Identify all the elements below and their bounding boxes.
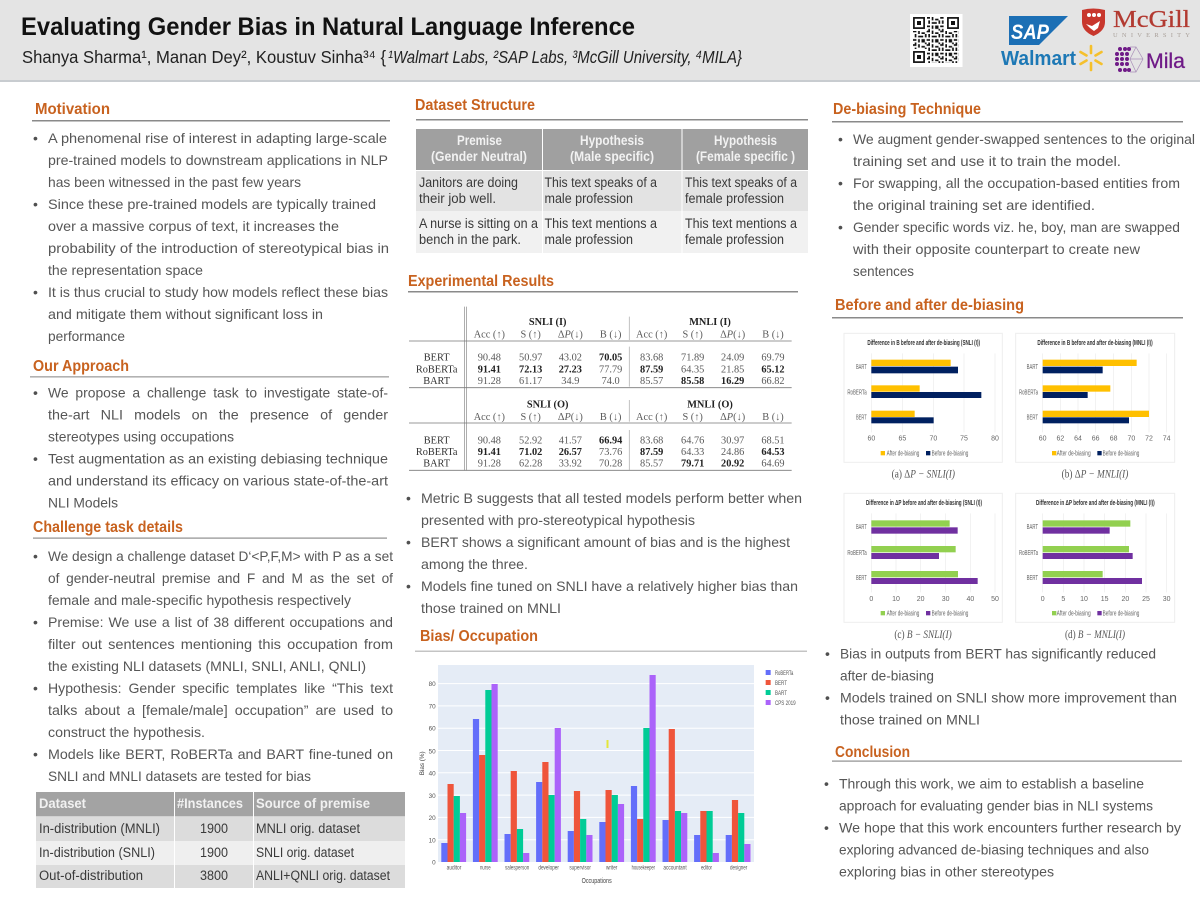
- chart b: 74: [1163, 435, 1171, 442]
- heading: Dataset Structure: Dataset Structure: [415, 97, 535, 114]
- text block: challenge bullets: [33, 548, 393, 784]
- text block: motivation bullets: performance: [48, 328, 125, 344]
- charts row 1: [844, 333, 1175, 480]
- text block: results bullets: presented with pro-stereotypical hypothesis: [421, 512, 695, 528]
- table: experimental results: 69.79: [761, 353, 785, 364]
- chart a: BART: [856, 364, 867, 371]
- authors and affiliations: ¹Walmart Labs, ²SAP Labs, ³McGill University, ⁴MILA}: [388, 47, 742, 67]
- chart d: (d) B − MNLI(I): [1065, 629, 1125, 641]
- chart axes and labels: Bias (%): [419, 751, 426, 775]
- text block: technique bullets: For swapping, all the occupation-based entities from: [853, 175, 1180, 191]
- chart c: (c) B − SNLI(I): [894, 629, 952, 641]
- table: experimental results: RoBERTa: [416, 447, 458, 458]
- chart a: Difference in B before and after de-biasing (SNLI (I)): [867, 340, 980, 347]
- chart c: BART: [856, 524, 867, 531]
- table: experimental results: 43.02: [559, 353, 582, 364]
- text block: approach bullets: and understand its efficacy on various state-of-the-art: [48, 472, 388, 488]
- table: experimental results: 66.82: [761, 376, 785, 387]
- text block: conclusion bullets: [824, 776, 1181, 880]
- table: experimental results: 27.23: [559, 364, 582, 375]
- table: experimental results: 62.28: [519, 459, 542, 470]
- chart legend: CPS 2019: [775, 700, 796, 707]
- text block: technique bullets: •: [838, 219, 843, 235]
- logo: McGill: UNIVERSITY: [1113, 32, 1190, 39]
- heading: Our Approach: Our Approach: [33, 358, 129, 375]
- text block: results bullets: •: [406, 578, 411, 594]
- text block: motivation bullets: •: [33, 196, 38, 212]
- table: experimental results: 72.13: [519, 364, 542, 375]
- table: dataset structure: (Female specific ): [696, 149, 795, 164]
- table: experimental results: 64.76: [681, 435, 704, 446]
- chart axes and labels: accountant: [663, 864, 687, 871]
- table: experimental results: 65.12: [761, 364, 785, 375]
- chart c: 50: [991, 596, 999, 603]
- chart c: Difference in ΔP before and after de-biasing (SNLI (I)): [866, 500, 982, 507]
- title: Evaluating Gender Bias in Natural Language Inference: [21, 13, 635, 41]
- text block: motivation bullets: pre-trained models to downstream applications in NLP: [48, 152, 388, 168]
- table: experimental results: 64.69: [761, 459, 785, 470]
- chart d: 0: [1041, 596, 1045, 603]
- text block: approach bullets: We propose a challenge task to investigate state-of-: [48, 384, 388, 400]
- chart d: [1016, 493, 1175, 641]
- chart b: 66: [1092, 435, 1100, 442]
- table: dataset structure: [416, 129, 808, 253]
- header band: [0, 0, 1200, 82]
- text block: conclusion bullets: approach for evaluating gender bias in NLI systems: [839, 798, 1153, 814]
- chart b: (b) ΔP − MNLI(I): [1062, 468, 1129, 480]
- table: experimental results: 91.28: [478, 459, 501, 470]
- chart b: [1016, 333, 1175, 480]
- chart axes and labels: Occupations: [582, 878, 612, 885]
- table: experimental results: MNLI (O): [687, 400, 733, 411]
- chart a: RoBERTa: [847, 389, 867, 396]
- table: experimental results: 87.59: [640, 447, 663, 458]
- table: experimental results: BERT: [424, 353, 450, 364]
- table: experimental results: 34.9: [561, 376, 579, 387]
- table: dataset sources: 1900: [200, 821, 228, 836]
- chart legend: BART: [775, 690, 787, 697]
- chart a: Before de-biasing: [932, 450, 968, 457]
- table: dataset sources: #Instances: [177, 796, 243, 811]
- table: dataset sources: In-distribution (SNLI): [39, 845, 155, 860]
- table: experimental results: B (↓): [600, 412, 621, 423]
- chart axes and labels: designer: [730, 864, 747, 871]
- table: dataset structure: Janitors are doing: [419, 175, 518, 190]
- text block: approach bullets: the-art NLI models on the presence of gender: [48, 406, 388, 422]
- table: experimental results: BART: [423, 376, 451, 387]
- table: experimental results: 83.68: [640, 353, 663, 364]
- table: experimental results: 91.41: [478, 447, 501, 458]
- table: dataset structure: This text mentions a: [544, 216, 657, 231]
- chart a: (a) ΔP − SNLI(I): [892, 468, 955, 480]
- chart c: 40: [966, 596, 974, 603]
- chart axes and labels: salesperson: [505, 864, 530, 871]
- table: dataset sources: [36, 792, 405, 888]
- table: experimental results: SNLI (I): [529, 317, 566, 328]
- chart axes and labels: developer: [538, 864, 559, 871]
- chart a: [844, 333, 1002, 480]
- chart d: RoBERTa: [1019, 550, 1038, 557]
- text block: results bullets: BERT shows a significant amount of bias and is the highest: [421, 534, 790, 550]
- table: experimental results: 52.92: [519, 435, 542, 446]
- text block: results bullets: [406, 490, 802, 616]
- table: dataset structure: bench in the park.: [419, 232, 521, 247]
- chart c: BERT: [856, 575, 867, 582]
- chart d: 10: [1080, 596, 1088, 603]
- table: dataset structure: A nurse is sitting on a: [419, 216, 538, 231]
- chart c: [844, 493, 1002, 641]
- table: experimental results: 79.71: [681, 459, 704, 470]
- chart b: RoBERTa: [1019, 389, 1038, 396]
- chart b: After de-biasing: [1057, 450, 1091, 457]
- text block: approach bullets: NLI Models: [48, 494, 118, 510]
- table: experimental results: 90.48: [478, 353, 501, 364]
- text block: technique bullets: sentences: [853, 263, 914, 279]
- table: experimental results: S (↑): [520, 329, 541, 340]
- table: dataset structure: male profession: [544, 191, 633, 206]
- table: experimental results: 85.57: [640, 376, 663, 387]
- chart d: 25: [1142, 596, 1150, 603]
- table: experimental results: 70.28: [599, 459, 622, 470]
- chart c: After de-biasing: [887, 610, 919, 617]
- table: dataset structure: This text speaks of a: [544, 175, 657, 190]
- table: dataset sources: MNLI orig. dataset: [256, 821, 360, 836]
- table: experimental results: Acc (↑): [474, 329, 505, 340]
- table: experimental results: 16.29: [721, 376, 744, 387]
- text block: approach bullets: stereotypes using occupations: [48, 428, 234, 444]
- authors and affiliations: Shanya Sharma¹, Manan Dey², Koustuv Sinha³⁴ {: [22, 47, 386, 67]
- text block: conclusion bullets: Through this work, we aim to establish a baseline: [839, 776, 1144, 792]
- text block: challenge bullets: Premise: We use a list of 38 different occupations and: [48, 614, 393, 630]
- text block: conclusion bullets: We hope that this work encounters further research by: [839, 820, 1181, 836]
- table: dataset structure: female profession: [685, 191, 784, 206]
- panel: left column: [30, 101, 405, 888]
- table: experimental results: 85.57: [640, 459, 663, 470]
- chart axes and labels: housekeeper: [632, 864, 655, 871]
- text block: conclusion bullets: •: [824, 820, 829, 836]
- table: experimental results: 68.51: [761, 435, 785, 446]
- text block: technique bullets: •: [838, 175, 843, 191]
- chart c: 0: [869, 596, 873, 603]
- text block: challenge bullets: talks about a [female/male] occupation” are used to: [48, 702, 393, 718]
- text block: approach bullets: •: [33, 450, 38, 466]
- chart a: 60: [867, 435, 875, 442]
- text block: results bullets: among the three.: [421, 556, 528, 572]
- table: dataset structure: Premise: [457, 133, 502, 148]
- table: experimental results: SNLI (O): [527, 400, 568, 411]
- bars: RoBERTa: [441, 719, 732, 862]
- chart b: 62: [1056, 435, 1064, 442]
- table: experimental results: 91.28: [478, 376, 501, 387]
- table: dataset structure: Hypothesis: [714, 133, 777, 148]
- text block: results bullets: •: [406, 490, 411, 506]
- table: experimental results: 70.05: [599, 353, 622, 364]
- chart axes and labels: 80: [429, 681, 436, 688]
- chart axes and labels: 60: [429, 726, 436, 733]
- text block: motivation bullets: over a massive corpus of text, it increases the: [48, 218, 339, 234]
- text block: motivation bullets: It is thus crucial to study how models reflect these bias: [48, 284, 388, 300]
- table: dataset sources: 1900: [200, 845, 228, 860]
- chart b: 64: [1074, 435, 1082, 442]
- chart d: 5: [1061, 596, 1065, 603]
- chart b: BERT: [1027, 414, 1038, 421]
- authors and affiliations: [22, 47, 742, 67]
- table: experimental results: B (↓): [762, 329, 784, 340]
- chart b: 60: [1039, 435, 1047, 442]
- chart legend: [766, 670, 796, 707]
- heading: Experimental Results: Experimental Results: [408, 273, 554, 290]
- table: experimental results: 33.92: [559, 459, 582, 470]
- chart c: 20: [917, 596, 925, 603]
- text block: de-biasing findings: •: [825, 646, 830, 662]
- charts row 2: [844, 493, 1175, 641]
- chart c: Before de-biasing: [932, 610, 968, 617]
- text block: motivation bullets: •: [33, 284, 38, 300]
- text block: results bullets: Metric B suggests that all tested models perform better when: [421, 490, 802, 506]
- text block: conclusion bullets: exploring advanced de-biasing techniques and also: [839, 842, 1149, 858]
- heading: Challenge task details: Challenge task details: [33, 519, 183, 536]
- table: experimental results: S (↑): [682, 412, 703, 423]
- table: experimental results: 50.97: [519, 353, 542, 364]
- chart axes and labels: auditor: [447, 864, 461, 871]
- chart a: 70: [929, 435, 937, 442]
- text block: challenge bullets: We design a challenge dataset D‘<P,F,M> with P as a set: [48, 548, 393, 564]
- heading: Before and after de-biasing: Before and after de-biasing: [835, 297, 1024, 314]
- logo: Mila: [1115, 47, 1185, 73]
- chart d: After de-biasing: [1057, 610, 1091, 617]
- chart axes and labels: 70: [429, 703, 436, 710]
- text block: results bullets: those trained on MNLI: [421, 600, 561, 616]
- table: experimental results: MNLI (I): [689, 317, 731, 328]
- chart d: 20: [1121, 596, 1129, 603]
- chart b: 72: [1145, 435, 1153, 442]
- text block: challenge bullets: Hypothesis: Gender specific templates like “This text: [48, 680, 393, 696]
- text block: motivation bullets: Since these pre-trained models are typically trained: [48, 196, 376, 212]
- text block: technique bullets: Gender specific words viz. he, boy, man are swapped: [853, 219, 1180, 235]
- chart a: 65: [898, 435, 906, 442]
- text block: motivation bullets: probability of the introduction of stereotypical bias in: [48, 240, 389, 256]
- chart b: 70: [1127, 435, 1135, 442]
- table: dataset sources: Out-of-distribution: [39, 868, 143, 883]
- text block: challenge bullets: •: [33, 746, 38, 762]
- table: experimental results: 85.58: [681, 376, 704, 387]
- text block: de-biasing findings: those trained on MNLI: [840, 712, 980, 728]
- logo: McGill: [1082, 7, 1190, 39]
- text block: de-biasing findings: after de-biasing: [840, 668, 934, 684]
- text block: challenge bullets: •: [33, 614, 38, 630]
- text block: motivation bullets: has been witnessed in the past few years: [48, 174, 301, 190]
- table: dataset sources: 3800: [200, 868, 228, 883]
- table: experimental results: BERT: [424, 435, 450, 446]
- table: experimental results: 77.79: [599, 364, 622, 375]
- panel: right column: [824, 101, 1195, 880]
- table: dataset structure: their job well.: [419, 191, 496, 206]
- text block: challenge bullets: filter out sentences mentioning this occupation from: [48, 636, 393, 652]
- table: experimental results: S (↑): [682, 329, 703, 340]
- chart a: After de-biasing: [887, 450, 919, 457]
- table: experimental results: ΔP(↓): [558, 329, 583, 340]
- text block: challenge bullets: •: [33, 548, 38, 564]
- text block: challenge bullets: Models like BERT, RoBERTa and BART fine-tuned on: [48, 746, 393, 762]
- logo: SAP: SAP: [1011, 21, 1050, 44]
- table: experimental results: 91.41: [478, 364, 501, 375]
- table: experimental results: 30.97: [721, 435, 744, 446]
- chart axes and labels: 20: [429, 815, 436, 822]
- chart d: BART: [1027, 524, 1038, 531]
- table: dataset structure: male profession: [544, 232, 633, 247]
- heading: Bias/ Occupation: Bias/ Occupation: [420, 628, 538, 645]
- chart axes and labels: 50: [429, 748, 436, 755]
- logo: Mila: Mila: [1146, 50, 1185, 73]
- logo: SAP: [1009, 16, 1068, 45]
- heading: De-biasing Technique: De-biasing Technique: [833, 101, 981, 118]
- text block: de-biasing findings: Bias in outputs from BERT has significantly reduced: [840, 646, 1156, 662]
- text block: challenge bullets: female and male-specific hypothesis respectively: [48, 592, 351, 608]
- chart c: 30: [942, 596, 950, 603]
- table: dataset sources: SNLI orig. dataset: [256, 845, 354, 860]
- table: dataset structure: This text speaks of a: [685, 175, 797, 190]
- heading: Motivation: Motivation: [35, 101, 110, 118]
- chart axes and labels: editor: [701, 864, 712, 871]
- table: experimental results: 71.89: [681, 353, 704, 364]
- table: experimental results: Acc (↑): [636, 412, 667, 423]
- table: experimental results: 90.48: [478, 435, 501, 446]
- chart legend: RoBERTa: [775, 670, 794, 677]
- table: dataset sources: Source of premise: [256, 796, 370, 811]
- table: experimental results: 66.94: [599, 435, 622, 446]
- text block: de-biasing findings: •: [825, 690, 830, 706]
- bars: CPS 2019: [460, 675, 750, 862]
- logo: Walmart: Walmart: [1001, 48, 1076, 70]
- table: experimental results: ΔP(↓): [720, 412, 745, 423]
- table: experimental results: 74.0: [602, 376, 620, 387]
- table: experimental results: RoBERTa: [416, 364, 458, 375]
- chart c: 10: [892, 596, 900, 603]
- table: dataset sources: Dataset: [39, 796, 86, 811]
- table: experimental results: S (↑): [520, 412, 541, 423]
- QR code: [910, 14, 962, 67]
- text block: motivation bullets: the representation space: [48, 262, 203, 278]
- table: dataset structure: This text mentions a: [685, 216, 797, 231]
- text block: technique bullets: the original training set are identified.: [853, 197, 1095, 213]
- text block: technique bullets: We augment gender-swapped sentences to the original: [853, 131, 1195, 147]
- table: experimental results: ΔP(↓): [720, 329, 745, 340]
- table: experimental results: 87.59: [640, 364, 663, 375]
- text block: challenge bullets: SNLI and MNLI datasets are tested for bias: [48, 768, 311, 784]
- chart axes and labels: nurse: [480, 864, 491, 871]
- table: dataset structure: (Male specific): [570, 149, 654, 164]
- chart d: Before de-biasing: [1103, 610, 1139, 617]
- text block: conclusion bullets: exploring bias in other stereotypes: [839, 864, 1054, 880]
- text block: de-biasing findings: [825, 646, 1177, 728]
- chart legend: BERT: [775, 680, 787, 687]
- table: experimental results: 20.92: [721, 459, 744, 470]
- text block: technique bullets: training set and use it to train the model.: [853, 153, 1121, 169]
- bars: BERT: [448, 729, 738, 862]
- chart axes and labels: [419, 670, 796, 885]
- chart d: 15: [1101, 596, 1109, 603]
- table: experimental results: ΔP(↓): [558, 412, 583, 423]
- text block: technique bullets: [838, 131, 1195, 279]
- table: experimental results: 64.53: [761, 447, 785, 458]
- table: experimental results: 21.85: [721, 364, 744, 375]
- bar chart: bias by occupation: [419, 665, 796, 885]
- table: experimental results: [409, 307, 792, 471]
- chart axes and labels: 10: [429, 837, 436, 844]
- chart axes and labels: 30: [429, 793, 436, 800]
- table: experimental results: 41.57: [559, 435, 582, 446]
- logo: McGill: McGill: [1113, 7, 1190, 33]
- text block: technique bullets: •: [838, 131, 843, 147]
- table: experimental results: 61.17: [519, 376, 542, 387]
- text block: motivation bullets: •: [33, 130, 38, 146]
- table: experimental results: B (↓): [600, 329, 621, 340]
- chart c: RoBERTa: [847, 550, 867, 557]
- chart b: BART: [1027, 364, 1038, 371]
- chart d: 30: [1163, 596, 1171, 603]
- text block: approach bullets: Test augmentation as an existing debiasing technique: [48, 450, 388, 466]
- chart axes and labels: 0: [432, 859, 436, 866]
- bars: BART: [454, 690, 744, 862]
- chart a: BERT: [856, 414, 867, 421]
- table: experimental results: 64.35: [681, 364, 704, 375]
- table: experimental results: BART: [423, 459, 451, 470]
- chart d: BERT: [1027, 575, 1038, 582]
- table: experimental results: 71.02: [519, 447, 542, 458]
- text block: de-biasing findings: Models trained on SNLI show more improvement than: [840, 690, 1177, 706]
- table: experimental results: 83.68: [640, 435, 663, 446]
- text block: challenge bullets: the existing NLI datasets (MNLI, SNLI, ANLI, QNLI): [48, 658, 366, 674]
- table: experimental results: 24.86: [721, 447, 744, 458]
- chart a: 80: [991, 435, 999, 442]
- text block: challenge bullets: construct the hypothesis.: [48, 724, 205, 740]
- chart axes and labels: writer: [605, 864, 617, 871]
- chart axes and labels: 40: [429, 771, 436, 778]
- table: experimental results: 64.33: [681, 447, 704, 458]
- text block: results bullets: •: [406, 534, 411, 550]
- table: dataset structure: Hypothesis: [580, 133, 644, 148]
- text block: approach bullets: •: [33, 384, 38, 400]
- table: dataset structure: (Gender Neutral): [431, 149, 527, 164]
- table: experimental results: 26.57: [559, 447, 582, 458]
- table: dataset sources: ANLI+QNLI orig. dataset: [256, 868, 390, 883]
- table: experimental results: B (↓): [762, 412, 784, 423]
- text block: motivation bullets: and mitigate them without significant loss in: [48, 306, 323, 322]
- text block: approach bullets: [33, 384, 388, 510]
- table: experimental results: Acc (↑): [636, 329, 667, 340]
- text block: technique bullets: with their opposite counterpart to create new: [852, 241, 1141, 257]
- table: dataset structure: female profession: [685, 232, 784, 247]
- chart b: 68: [1110, 435, 1118, 442]
- text block: motivation bullets: A phenomenal rise of interest in adapting large-scale: [48, 130, 387, 146]
- table: dataset sources: In-distribution (MNLI): [39, 821, 160, 836]
- heading: Conclusion: Conclusion: [835, 744, 910, 761]
- table: experimental results: 73.76: [599, 447, 622, 458]
- text block: challenge bullets: of gender-neutral premise and F and M as the set of: [48, 570, 393, 586]
- chart a: 75: [960, 435, 968, 442]
- chart b: Before de-biasing: [1103, 450, 1139, 457]
- text block: conclusion bullets: •: [824, 776, 829, 792]
- text block: motivation bullets: [33, 130, 389, 344]
- text block: results bullets: Models fine tuned on SNLI have a relatively higher bias than: [421, 578, 798, 594]
- text block: challenge bullets: •: [33, 680, 38, 696]
- chart axes and labels: supervisor: [569, 864, 591, 871]
- table: experimental results: Acc (↑): [474, 412, 505, 423]
- table: experimental results: 24.09: [721, 353, 744, 364]
- panel: middle column: [406, 97, 808, 885]
